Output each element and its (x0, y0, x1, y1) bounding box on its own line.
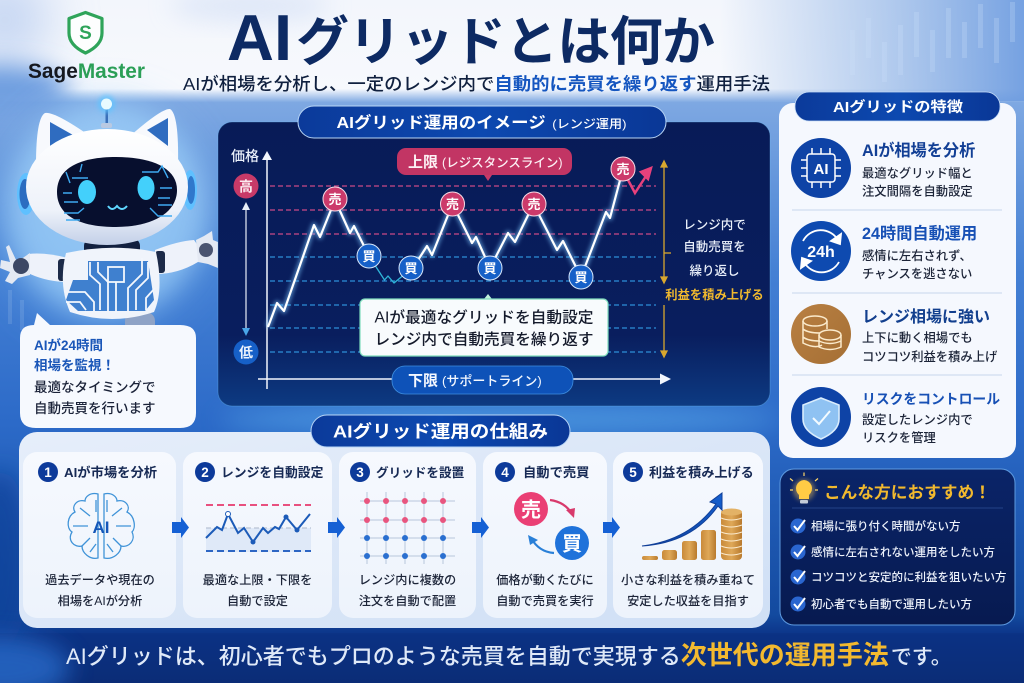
axes (258, 160, 665, 389)
torso with circuit (63, 248, 160, 319)
feature 4: リスクをコントロール (862, 391, 1000, 407)
feature 1: AIが相場を分析 (862, 141, 975, 160)
heading pill: chart (298, 106, 666, 138)
title: AI (227, 1, 292, 74)
card 4: 価格が動くたびに (496, 572, 594, 587)
buy markers: 買 (483, 261, 497, 276)
feature 1: 注文間隔を自動設定 (862, 184, 973, 198)
feature 1 (791, 138, 975, 198)
grid lines (270, 186, 656, 352)
icon: sell and buy cycle: 買 (562, 534, 582, 556)
card 4: 自動で売買を実行 (496, 593, 594, 608)
price line (268, 169, 623, 327)
icon: AI chip (801, 148, 841, 188)
card 2: 2 (201, 465, 209, 480)
robot mascot (0, 95, 225, 337)
ears (36, 109, 178, 165)
panel: recommendation (780, 469, 1015, 625)
AI label: AI (92, 518, 110, 537)
bubble highlight line 2: 相場を監視！ (34, 357, 115, 373)
low badge (234, 340, 258, 364)
card 1: 過去データや現在の (45, 572, 155, 587)
card 3: レンジ内に複数の (359, 572, 456, 587)
high badge: 高 (239, 178, 253, 194)
mini chart: range (206, 505, 311, 552)
arms and hands (0, 231, 225, 284)
heading pill: chart: AIグリッド運用のイメージ (レンジ運用) (336, 113, 626, 132)
legs (124, 312, 158, 337)
range annotation (665, 217, 764, 302)
card 5: 安定した収益を目指す (627, 593, 749, 608)
title: グリッドとは何か (296, 13, 715, 72)
icon: sell and buy cycle: 売 (521, 498, 541, 522)
upper limit label (397, 148, 572, 181)
card 3: 注文を自動で配置 (359, 593, 456, 608)
bubble text line 2: 自動売買を行います (34, 401, 156, 416)
upper limit label: 上限 (レジスタンスライン) (408, 154, 563, 171)
feature 2 (791, 221, 977, 281)
gold range bracket (661, 161, 671, 357)
card 3 (339, 452, 476, 618)
card 1 (23, 452, 176, 618)
neck (84, 238, 140, 258)
heading pill: features (795, 92, 1000, 121)
panel: how it works (19, 432, 770, 628)
card 2: 最適な上限・下限を (203, 572, 312, 587)
card 1: 相場をAIが分析 (58, 593, 142, 608)
card 3: 3 (356, 465, 364, 480)
range annotation: レンジ内で (683, 217, 746, 232)
sell markers: 売 (616, 162, 630, 177)
sell markers: 売 (328, 192, 342, 207)
range annotation: 繰り返し (689, 264, 740, 278)
lower limit label (392, 366, 573, 394)
bubble text: 最適なタイミングで (34, 379, 156, 395)
green-edged callout (360, 294, 608, 356)
speech bubble (20, 313, 196, 428)
icon: light bulb (790, 472, 818, 504)
bubble highlight text: AIが24時間 (34, 337, 103, 353)
check items (790, 518, 1006, 612)
headphones (17, 170, 197, 215)
feature 3 (791, 304, 998, 364)
feature 3: コツコツ利益を積み上げ (862, 349, 998, 364)
feature 4: リスクを管理 (862, 430, 936, 445)
range annotation: 利益を積み上げる (665, 287, 764, 302)
feature 2: 感情に左右されず、 (862, 248, 972, 263)
icon: coin stacks (803, 316, 841, 350)
icon: shield (803, 398, 839, 439)
icon: 24h cycle (801, 230, 841, 272)
heading pill: how it works (311, 415, 570, 447)
feature dividers (792, 210, 1002, 375)
card 4: 自動で売買 (523, 464, 589, 480)
axis arrowheads (262, 151, 671, 384)
recommendation heading: こんな方におすすめ！ (824, 482, 991, 502)
check items: 初心者でも自動で運用したい方 (811, 597, 972, 611)
heading pill: features: AIグリッドの特徴 (833, 98, 964, 116)
buy markers: 買 (404, 261, 418, 276)
antenna (98, 95, 116, 128)
buy markers (357, 244, 593, 289)
icon: growing coin stacks (642, 493, 742, 560)
axis label: price: 価格 (231, 148, 259, 164)
card 4 (483, 452, 607, 618)
feature 4: 設定したレンジ内で (862, 412, 973, 427)
green-edged callout: レンジ内で自動売買を繰り返す (374, 330, 594, 348)
green-edged callout: AIが最適なグリッドを自動設定 (374, 308, 594, 326)
logo: SageMaster (28, 12, 145, 83)
panel: features (779, 103, 1016, 458)
icon: order grid (360, 492, 455, 564)
face screen (57, 157, 177, 227)
card 1: 1 (44, 465, 52, 480)
head (26, 129, 188, 245)
range annotation: 自動売買を (683, 239, 746, 254)
chip label: AI (814, 161, 828, 178)
icon: sell and buy cycle (514, 492, 589, 560)
check items: コツコツと安定的に利益を狙いたい方 (811, 570, 1006, 584)
sell markers: 売 (527, 197, 541, 212)
card 2: レンジを自動設定 (221, 465, 324, 480)
feature 3: レンジ相場に強い (862, 308, 990, 326)
card 2 (183, 452, 332, 618)
card 5: 小さな利益を積み重ねて (621, 572, 755, 587)
cycle label: 24h (807, 244, 835, 261)
lower limit label: 下限 (サポートライン) (408, 372, 542, 390)
card 1: AIが市場を分析 (64, 464, 157, 480)
subtitle: AIが相場を分析し、一定のレンジ内で 自動的に売買を繰り返す 運用手法 (183, 74, 771, 94)
buy markers: 買 (574, 270, 588, 285)
vertical double arrow (242, 202, 250, 336)
low badge: 低 (239, 344, 253, 360)
icon: AI brain (68, 494, 134, 558)
buy markers: 買 (362, 249, 376, 264)
feature 4 (791, 387, 1000, 447)
card 4: 4 (501, 465, 509, 480)
heading pill: how it works: AIグリッド運用の仕組み (333, 420, 548, 442)
footer message: AIグリッドは、初心者でもプロのような売買を自動で実現する次世代の運用手法です。 (66, 640, 952, 670)
feature 1: 最適なグリッド幅と (862, 166, 973, 180)
feature 3: 上下に動く相場でも (862, 330, 973, 345)
panel: chart (218, 122, 770, 406)
card 5: 5 (629, 465, 637, 480)
icon: green shield: S (79, 23, 92, 44)
sell markers (323, 157, 635, 216)
step arrows (172, 517, 620, 538)
card 5 (613, 452, 763, 618)
sell markers: 売 (446, 197, 459, 212)
check items: 相場に張り付く時間がない方 (811, 519, 960, 533)
card 5: 利益を積み上げる (649, 464, 754, 480)
card 2: 自動で設定 (227, 593, 288, 608)
check items: 感情に左右されない運用をしたい方 (811, 545, 995, 559)
logo wordmark: SageMaster (28, 60, 145, 83)
feature 2: チャンスを逃さない (862, 266, 972, 281)
feature 2: 24時間自動運用 (862, 224, 977, 243)
card 3: グリッドを設置 (376, 465, 465, 480)
pink trend arrow (627, 168, 651, 193)
high badge (234, 174, 258, 198)
